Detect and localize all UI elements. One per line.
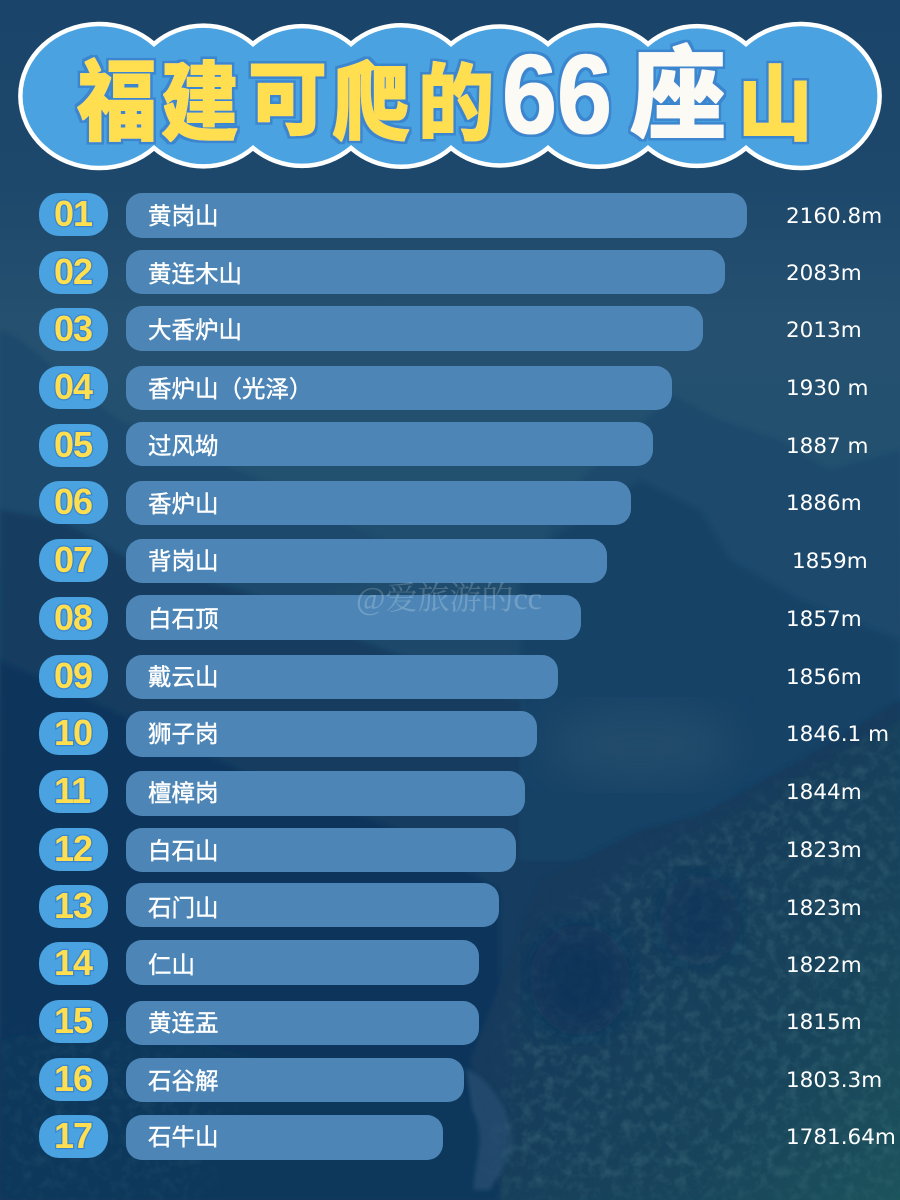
row 13	[39, 883, 862, 928]
row 04	[39, 366, 868, 410]
bar 01	[126, 193, 747, 238]
height 08: 1857m	[786, 607, 862, 632]
row 14	[39, 940, 862, 985]
height 10: 1846.1 m	[786, 722, 889, 747]
rank badge 10: 10	[54, 712, 92, 753]
row 03	[39, 306, 862, 351]
bar 08: 白石顶	[148, 606, 218, 632]
title text: 山	[738, 61, 812, 151]
rank badge 06: 06	[54, 481, 92, 522]
rank badge 13: 13	[54, 885, 92, 926]
bar 12: 白石山	[148, 838, 218, 864]
title text: 福	[77, 53, 157, 152]
rank badge 09: 09	[54, 655, 92, 696]
row 01	[39, 193, 882, 238]
row 16	[39, 1058, 882, 1102]
river	[466, 1068, 514, 1190]
bar 08	[126, 595, 581, 640]
height 14: 1822m	[786, 953, 862, 978]
row 06	[39, 481, 862, 525]
rank badge 05: 05	[54, 424, 92, 465]
bar 10	[126, 711, 537, 757]
rank badge 03: 03	[54, 308, 92, 349]
bar 02: 黄连木山	[148, 261, 242, 287]
rank badge 06	[39, 481, 108, 524]
bar 04: 香炉山（光泽）	[148, 376, 312, 402]
row 15	[39, 1000, 862, 1045]
row 09	[39, 655, 862, 699]
bar 09: 戴云山	[148, 664, 218, 690]
bar 02	[126, 250, 725, 294]
row 12	[39, 828, 862, 872]
rank badge 13	[39, 885, 108, 928]
height 02: 2083m	[786, 261, 862, 286]
bar 04	[126, 366, 672, 410]
rank badge 07: 07	[54, 539, 92, 580]
bar 17: 石牛山	[148, 1124, 218, 1150]
title banner: cloud shape with heading	[18, 22, 882, 170]
bar 06: 香炉山	[148, 491, 218, 517]
height 13: 1823m	[786, 896, 862, 921]
height 07: 1859m	[792, 549, 868, 574]
bar 16	[126, 1058, 464, 1102]
cloud banner shape	[20, 24, 880, 168]
height 05: 1887 m	[786, 434, 868, 459]
bar 14	[126, 940, 479, 985]
bar 15: 黄连盂	[148, 1010, 218, 1036]
row 07	[39, 539, 868, 583]
height 09: 1856m	[786, 665, 862, 690]
bar 07: 背岗山	[148, 548, 218, 574]
bar 01: 黄岗山	[148, 203, 218, 229]
title text: 可	[248, 55, 327, 145]
row 05	[39, 422, 868, 467]
rank badge 04: 04	[54, 366, 92, 407]
bar 05: 过风坳	[148, 433, 218, 459]
rank badge 16	[39, 1058, 108, 1101]
bar 09	[126, 655, 558, 699]
rank badge 08: 08	[54, 597, 92, 638]
rank badge 16: 16	[54, 1058, 92, 1099]
title text: 建	[161, 57, 239, 152]
bar 13	[126, 883, 499, 927]
bar 17	[126, 1115, 443, 1160]
title text: 爬	[332, 57, 410, 152]
row 10	[39, 711, 889, 757]
height 16: 1803.3m	[786, 1068, 882, 1093]
rank badge 07	[39, 539, 108, 582]
title text	[77, 32, 812, 157]
row 11	[39, 770, 862, 816]
rank badge 15	[39, 1000, 108, 1043]
rank badge 14: 14	[54, 942, 92, 983]
rank badge 04	[39, 366, 108, 409]
height 12: 1823m	[786, 838, 862, 863]
bar 03: 大香炉山	[148, 317, 242, 343]
rank badge 11	[39, 770, 108, 813]
rank badge 05	[39, 424, 108, 467]
bar 05	[126, 422, 653, 466]
bar 12	[126, 828, 516, 872]
row 02	[39, 250, 862, 294]
rank badge 14	[39, 942, 108, 985]
bar 06	[126, 481, 631, 525]
bar 07	[126, 539, 607, 583]
height 15: 1815m	[786, 1010, 862, 1035]
height 03: 2013m	[786, 318, 862, 343]
bar 14: 仁山	[148, 952, 195, 978]
bar 15	[126, 1001, 479, 1045]
bar 11: 檀樟岗	[148, 780, 218, 806]
rank badge 17	[39, 1115, 108, 1158]
height 01: 2160.8m	[786, 204, 882, 229]
height 17: 1781.64m	[786, 1125, 896, 1150]
bar 16: 石谷解	[148, 1068, 218, 1094]
watermark: @爱旅游的cc	[356, 580, 542, 616]
rank badge 03	[39, 308, 108, 351]
rank badge 12	[39, 828, 108, 871]
rank badge 01	[39, 193, 108, 236]
bar 11	[126, 771, 525, 816]
title text: 66	[502, 32, 612, 157]
rank badge 02	[39, 251, 108, 294]
bar 03	[126, 306, 703, 351]
rank badge 09	[39, 655, 108, 698]
height 11: 1844m	[786, 780, 862, 805]
row 17	[39, 1115, 896, 1160]
title text: 的	[418, 58, 494, 151]
row 08	[39, 595, 862, 640]
rank badge 11: 11	[54, 770, 90, 811]
title text: 座	[630, 39, 726, 151]
rank badge 02: 02	[54, 251, 92, 292]
bar 13: 石门山	[148, 895, 218, 921]
rank badge 01: 01	[54, 193, 92, 234]
rank badge 17: 17	[54, 1115, 92, 1156]
height 06: 1886m	[786, 491, 862, 516]
rank badge 12: 12	[54, 828, 92, 869]
height 04: 1930 m	[786, 376, 868, 401]
rank badge 10	[39, 712, 108, 755]
rank badge 08	[39, 597, 108, 640]
rank badge 15: 15	[54, 1000, 92, 1041]
bar 10: 狮子岗	[148, 721, 218, 747]
